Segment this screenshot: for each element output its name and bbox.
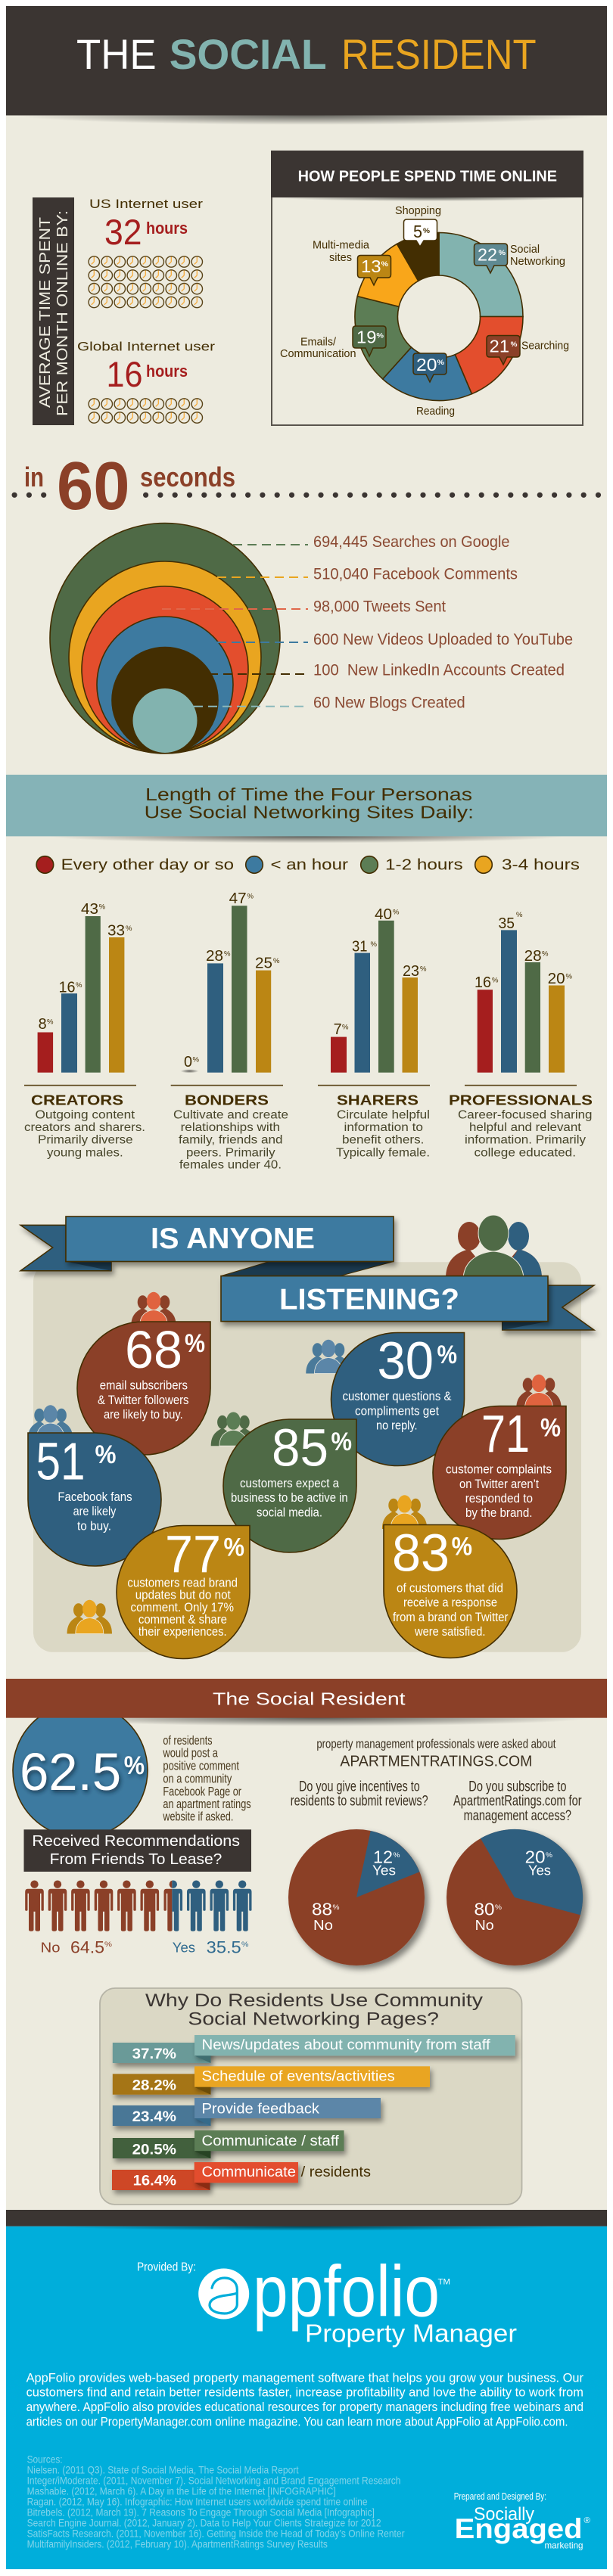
persona: creators <box>24 1085 145 1159</box>
sixty second stats list: 98,000 Tweets Sent <box>313 598 446 616</box>
ribbon bar: news 37.7% <box>113 2035 515 2063</box>
pie chart: subscribe: 80 <box>474 1900 495 1919</box>
ribbon: listening <box>221 1276 594 1330</box>
logo: appfolio <box>198 2251 517 2348</box>
credit: socially engaged marketing: ® <box>584 2516 590 2525</box>
text: sources: MultifamilyInsiders. (2012, February 10). ApartmentRatings Survey Results <box>27 2538 328 2550</box>
stat bubble: 30%: 30 <box>377 1332 434 1391</box>
stat bubble: 85%: customers expect a <box>240 1476 339 1490</box>
text: 62.5% description: of residents <box>163 1733 212 1748</box>
donut category labels: Communication <box>280 347 356 360</box>
bar chart: professionals: 20 <box>548 971 565 987</box>
donut category labels: Emails/ <box>300 336 337 348</box>
legend <box>36 856 580 873</box>
persona: sharers: benefit others. <box>342 1133 424 1146</box>
callout: social networking 22%: % <box>499 249 506 256</box>
US internet user stat: 32 <box>104 212 142 252</box>
credit: socially engaged marketing: Engaged <box>455 2513 583 2544</box>
panel: why residents use community pages: Why Do Residents Use Community <box>145 1990 483 2011</box>
callout: searching 21%: % <box>511 340 517 348</box>
bar chart: professionals <box>475 911 572 1073</box>
stat bubble: 51%: Facebook fans <box>58 1490 132 1504</box>
footer panel: cyan <box>6 2226 607 2569</box>
recommendation results <box>41 1938 248 1957</box>
text: 62.5% description: positive comment <box>163 1759 239 1773</box>
ribbon bar: events 28.2%: Schedule of events/activities <box>201 2069 395 2085</box>
text: apartment ratings intro: Do you subscribe to <box>468 1779 566 1794</box>
text: 62.5% description: would post a <box>163 1746 218 1760</box>
stat bubble: 77%: their experiences. <box>138 1625 227 1639</box>
cream page background <box>6 115 607 2211</box>
ribbon bar: communicate staff 20.5%: Communicate / staff <box>201 2133 340 2149</box>
icon: people left of 85% <box>211 1412 256 1446</box>
heading: in 60 seconds: seconds <box>140 461 235 493</box>
ribbon: listening: LISTENING? <box>279 1283 459 1316</box>
panel: why residents use community pages: Social Networking Pages? <box>188 2009 439 2030</box>
persona: sharers: Circulate helpful <box>337 1109 430 1121</box>
persona: bonders: Cultivate and create <box>173 1109 288 1121</box>
stat bubble: 51% <box>28 1431 161 1566</box>
stat bubble: 68%: % <box>185 1329 205 1358</box>
title banner: SOCIAL <box>170 30 327 78</box>
bar chart: bonders: % <box>224 950 230 958</box>
stat bubble: 77%: comment & share <box>138 1613 227 1627</box>
callout: shopping 5%: % <box>423 227 430 235</box>
ribbon bar: communicate residents 16.4%: Communicate <box>201 2164 296 2180</box>
text: 62.5% description: Facebook Page or <box>163 1784 241 1798</box>
bar chart: professionals: % <box>492 976 498 983</box>
provided by label: Provided By: <box>137 2261 196 2274</box>
bar chart: sharers: 31 <box>352 939 368 956</box>
ribbon bar: news 37.7%: News/updates about community from staff <box>201 2037 490 2053</box>
ribbon bar: communicate staff 20.5% <box>113 2130 344 2158</box>
text: apartment ratings intro: residents to submit reviews? <box>291 1793 428 1809</box>
stat bubble: 83% <box>384 1524 517 1658</box>
persona: professionals: helpful and relevant <box>469 1121 582 1134</box>
icon: people above 51% <box>28 1405 73 1439</box>
text: sources: SatisFacts Research. (2011, November 16). Getting Inside the Head of Today’s Online Renter <box>27 2528 405 2540</box>
bar chart: bonders: % <box>273 957 280 965</box>
pie chart: subscribe: % <box>495 1903 502 1911</box>
credit: socially engaged marketing: marketing <box>545 2540 583 2551</box>
heading: recommendations: From Friends To Lease? <box>50 1851 222 1868</box>
text: appfolio description: customers find and retain better residents faster, increase profitability and love the ability to work from <box>26 2385 583 2400</box>
ribbon bar: events 28.2%: 28.2% <box>132 2077 176 2093</box>
bar chart: bonders: 0 <box>184 1054 192 1070</box>
stat bubble: 68%: 68 <box>125 1320 182 1379</box>
stat circle: 62.5% <box>12 1717 148 1829</box>
section banner: personas: Use Social Networking Sites Daily: <box>145 803 474 822</box>
global internet user stat: Global Internet user <box>77 339 215 354</box>
stat bubble: 51%: 51 <box>36 1431 85 1490</box>
sixty second stats list: 60 New Blogs Created <box>313 694 465 712</box>
donut category labels: sites <box>329 251 352 264</box>
stat bubble: 85%: % <box>331 1428 352 1456</box>
icon row: ten people <box>25 1881 252 1931</box>
heading: in 60 seconds: in <box>24 461 44 493</box>
text: sources: Ragan. (2012, May 16). Infographic: How Internet users worldwide spend time online <box>27 2496 368 2508</box>
dark divider band <box>6 2210 607 2226</box>
bar chart: professionals: % <box>542 950 548 958</box>
US internet user stat: hours <box>146 219 188 238</box>
heading: recommendations: Received Recommendations <box>32 1833 240 1850</box>
stat bubble: 71%: on Twitter aren’t <box>459 1477 539 1491</box>
icon: 18 clocks <box>89 399 203 423</box>
stat bubble: 30%: no reply. <box>376 1418 418 1433</box>
global internet user stat: hours <box>146 362 188 381</box>
title banner <box>6 6 607 115</box>
recommendation results: No <box>41 1941 61 1956</box>
stat bubble: 85% <box>223 1418 356 1552</box>
icon: people above 71% <box>516 1375 562 1409</box>
donut category labels <box>280 204 569 418</box>
bar chart: sharers: 40 <box>375 906 392 923</box>
persona: bonders: peers. Primarily <box>186 1146 275 1159</box>
stat bubble: 83%: were satisfied. <box>414 1624 486 1639</box>
persona: bonders <box>171 1085 288 1172</box>
heading: in 60 seconds <box>24 449 235 524</box>
pie chart: subscribe: No <box>475 1918 494 1933</box>
vertical heading: average time spent: PER MONTH ONLINE BY: <box>54 210 71 416</box>
ribbon: is anyone <box>20 1217 394 1276</box>
icon: people above 83% <box>382 1495 427 1529</box>
stat bubble: 30% <box>331 1332 465 1466</box>
vertical heading: average time spent <box>33 197 74 425</box>
icon: 36 clocks <box>89 256 203 308</box>
stat bubble: 85%: business to be active in <box>231 1490 348 1505</box>
icon: people left of 30% <box>306 1340 351 1374</box>
stat bubble: 77%: updates but do not <box>135 1589 231 1602</box>
sixty second stats list: 100 New LinkedIn Accounts Created <box>313 662 565 679</box>
ribbon bar: feedback 23.4% <box>113 2098 381 2126</box>
callout: shopping 5%: 5 <box>413 222 422 241</box>
ribbon bar: communicate residents 16.4% <box>112 2162 371 2190</box>
bar chart: sharers: % <box>371 940 377 948</box>
band shadow <box>49 829 564 843</box>
bar chart: bonders: % <box>192 1056 199 1064</box>
recommendation results: 64.5 <box>70 1938 104 1957</box>
callout: emails 19% <box>353 326 386 356</box>
credit: socially engaged marketing <box>454 2491 590 2551</box>
logo: appfolio: TM <box>437 2277 450 2286</box>
text: apartment ratings intro: APARTMENTRATINGS.COM <box>340 1753 532 1770</box>
sixty second stats list <box>313 533 573 712</box>
bar chart: sharers <box>331 906 427 1073</box>
stat bubble: 77%: % <box>224 1533 244 1562</box>
section banner: personas <box>6 775 607 836</box>
ribbon bar: feedback 23.4%: Provide feedback <box>201 2101 320 2117</box>
stat bubble: 71%: % <box>540 1414 561 1443</box>
stat bubble: 83%: % <box>452 1533 472 1561</box>
ribbon bar: communicate residents 16.4%: 16.4% <box>133 2173 176 2189</box>
legend: 1-2 hours <box>385 856 463 873</box>
persona: bonders: females under 40. <box>179 1159 282 1172</box>
stat bubble: 51%: to buy. <box>77 1518 111 1533</box>
persona: sharers: SHARERS <box>337 1092 419 1108</box>
pie chart: incentives: Yes <box>372 1863 396 1878</box>
text: sources: Mashable. (2012, March 6). A Day in the Life of the Internet [INFOGRAPHIC] <box>27 2485 336 2497</box>
text: sources <box>27 2453 405 2550</box>
callout: social networking 22% <box>474 244 507 273</box>
dashed leader lines <box>162 545 308 707</box>
bar chart: sharers: 23 <box>403 963 419 980</box>
callout: multi-media 13% <box>357 256 391 285</box>
stat bubble: 68%: email subscribers <box>100 1378 188 1393</box>
pie chart: incentives: % <box>394 1851 400 1859</box>
bar chart: creators: % <box>99 903 105 911</box>
text: apartment ratings intro: management access? <box>464 1808 571 1824</box>
vertical heading: average time spent: AVERAGE TIME SPENT <box>37 217 54 408</box>
stat bubble: 77% <box>117 1524 250 1658</box>
text: sources: Search Engine Journal. (2012, January 2). Data to Help Your Clients Strategize for 2012 <box>27 2517 381 2529</box>
title banner: RESIDENT <box>341 30 537 78</box>
persona: bonders: family, friends and <box>179 1133 283 1146</box>
pie chart: incentives: 12 <box>373 1847 393 1867</box>
credit: socially engaged marketing: Prepared and Designed By: <box>454 2491 546 2502</box>
bar chart: professionals: % <box>516 911 522 918</box>
callout: emails 19%: 19 <box>356 328 376 347</box>
bar chart: professionals: % <box>566 972 572 980</box>
stat bubble: 68%: are likely to buy. <box>104 1407 183 1422</box>
pie chart: subscribe: 20 <box>525 1847 545 1867</box>
stat bubble: 71%: customer complaints <box>446 1462 552 1477</box>
donut category labels: Reading <box>416 405 455 418</box>
ribbon: is anyone: IS ANYONE <box>151 1223 315 1255</box>
callout: searching 21%: 21 <box>490 336 509 356</box>
icon: people left of 77% <box>67 1600 112 1634</box>
ribbon bar: news 37.7%: 37.7% <box>132 2046 176 2062</box>
pie chart: subscribe: Yes <box>528 1863 551 1878</box>
text: sources: Nielsen. (2011 Q3). State of Social Media, The Social Media Report <box>27 2464 299 2476</box>
band shadow <box>45 1710 590 1726</box>
stat circle: 62.5%: % <box>124 1751 145 1780</box>
nested circles chart <box>50 524 280 754</box>
persona: professionals <box>449 1085 593 1159</box>
section banner: the social resident <box>6 1679 607 1718</box>
ribbon bar: feedback 23.4%: 23.4% <box>132 2109 176 2125</box>
legend: Every other day or so <box>61 856 234 873</box>
text: appfolio description: AppFolio provides web-based property management software that helps you grow your business. Our <box>26 2370 583 2385</box>
text: apartment ratings intro: Do you give incentives to <box>299 1779 420 1794</box>
bar chart: sharers: 7 <box>334 1021 342 1038</box>
persona: bonders: relationships with <box>181 1121 280 1134</box>
pie chart: subscribe <box>447 1829 583 1965</box>
stat bubble: 77%: 77 <box>165 1524 221 1583</box>
US internet user stat: US Internet user <box>89 197 203 211</box>
bar chart: bonders: % <box>247 892 254 900</box>
panel: how people spend time online <box>271 151 583 425</box>
text: sources: Integer/iModerate. (2011, November 7). Social Networking and Brand Engagement Research <box>27 2475 400 2487</box>
bar chart: creators: 16 <box>59 979 76 996</box>
bar chart: creators: % <box>76 981 82 989</box>
callout: multi-media 13%: 13 <box>361 256 381 276</box>
recommendation results: 35.5 <box>207 1938 241 1957</box>
bar chart: creators: 8 <box>39 1016 47 1033</box>
persona: sharers <box>318 1085 430 1159</box>
ribbon bar: events 28.2% <box>113 2066 430 2095</box>
stat bubble: 83%: from a brand on Twitter <box>393 1610 509 1624</box>
stat bubble: 83%: 83 <box>392 1524 450 1583</box>
stat bubble: 30%: % <box>437 1341 457 1369</box>
bar chart: creators: 43 <box>81 901 98 918</box>
persona: creators: CREATORS <box>31 1092 123 1108</box>
stat bubble: 30%: customer questions & <box>342 1389 452 1403</box>
logo: appfolio: ppfolio <box>253 2251 440 2332</box>
pie chart: incentives: No <box>313 1918 333 1933</box>
heading: recommendations <box>24 1829 251 1872</box>
bar chart: bonders <box>180 890 280 1073</box>
recommendation results: % <box>104 1941 112 1948</box>
donut chart <box>355 233 523 401</box>
donut category labels: Networking <box>510 255 565 268</box>
icon: large listening group <box>446 1215 542 1280</box>
bar chart: creators <box>38 901 132 1073</box>
persona: sharers: information to <box>344 1121 423 1134</box>
sixty second stats list: 600 New Videos Uploaded to YouTube <box>313 631 573 648</box>
pie chart: incentives: 88 <box>312 1900 332 1919</box>
callout: reading 20% <box>413 353 447 382</box>
donut category labels: Shopping <box>395 204 441 217</box>
persona: professionals: college educated. <box>474 1146 576 1159</box>
bar chart: sharers: % <box>393 908 400 915</box>
header band shadow <box>15 105 598 125</box>
bar chart: creators: % <box>126 924 132 932</box>
stat bubble: 77%: comment. Only 17% <box>130 1601 234 1614</box>
sixty second stats list: 510,040 Facebook Comments <box>313 566 518 583</box>
persona: creators: young males. <box>47 1146 123 1159</box>
title banner: THE <box>76 30 157 78</box>
stat bubble: 51%: are likely <box>73 1504 117 1518</box>
stat bubble: 85%: 85 <box>272 1418 328 1477</box>
callout: reading 20%: 20 <box>416 355 437 374</box>
recommendation results: % <box>241 1941 248 1948</box>
pie chart: incentives <box>288 1829 425 1965</box>
stat bubble: 71%: by the brand. <box>465 1506 533 1520</box>
stat bubble: 51%: % <box>95 1440 117 1469</box>
logo: appfolio: a <box>203 2267 232 2326</box>
sixty second stats list: 694,445 Searches on Google <box>313 533 510 551</box>
persona: sharers: Typically female. <box>336 1146 430 1159</box>
footer band shadow <box>57 2222 556 2231</box>
text: 62.5% description: an apartment ratings <box>163 1797 251 1811</box>
panel: how people spend time online: HOW PEOPLE SPEND TIME ONLINE <box>298 168 557 185</box>
pie chart: subscribe: % <box>546 1851 552 1859</box>
dotted rule <box>12 493 601 498</box>
persona: professionals: PROFESSIONALS <box>449 1092 593 1108</box>
persona: creators: Outgoing content <box>35 1109 135 1121</box>
donut category labels: Social <box>510 243 540 256</box>
global internet user stat: 16 <box>106 354 142 394</box>
global internet user stat <box>77 339 215 394</box>
callout: searching 21% <box>487 336 520 365</box>
text: apartment ratings intro <box>291 1737 582 1824</box>
bar chart: creators: 33 <box>107 923 125 940</box>
bar chart: professionals: 28 <box>524 948 542 965</box>
bar chart: professionals: 16 <box>475 974 491 991</box>
bar chart: sharers: % <box>342 1023 348 1030</box>
credit: socially engaged marketing: Socially <box>474 2504 534 2525</box>
callout: emails 19%: % <box>376 331 384 339</box>
callout: shopping 5% <box>404 219 437 247</box>
icon: people above 68% <box>131 1292 176 1325</box>
text: sources: Bitrebels. (2012, March 19). 7 Reasons To Engage Through Social Media [Infographic] <box>27 2506 375 2519</box>
legend: 3-4 hours <box>502 856 580 873</box>
callout: social networking 22%: 22 <box>478 245 497 265</box>
callout: multi-media 13%: % <box>381 260 388 268</box>
ribbon bar: communicate residents 16.4%: / residents <box>301 2164 371 2180</box>
bar chart: bonders: 25 <box>255 955 272 971</box>
stat bubble: 77%: customers read brand <box>127 1577 238 1590</box>
stat bubble: 68% <box>77 1320 210 1455</box>
stat bubble: 30%: compliments get <box>355 1403 439 1418</box>
stat bubble: 71%: 71 <box>481 1404 530 1463</box>
bar chart: sharers: % <box>420 965 427 973</box>
stat bubble: 85%: social media. <box>257 1505 322 1519</box>
persona: professionals: Career-focused sharing <box>458 1109 592 1121</box>
persona: bonders: BONDERS <box>185 1092 269 1108</box>
donut category labels: Multi-media <box>313 239 370 251</box>
stat bubble: 71% <box>433 1404 566 1539</box>
persona: creators: creators and sharers. <box>24 1121 145 1134</box>
stat bubble: 68%: & Twitter followers <box>98 1393 189 1407</box>
panel: why residents use community pages <box>100 1988 522 2205</box>
stat circle: 62.5%: 62.5 <box>20 1742 121 1801</box>
text: appfolio description <box>26 2370 583 2428</box>
donut category labels: Searching <box>521 339 569 353</box>
persona: creators: Primarily diverse <box>38 1133 133 1146</box>
pie chart: incentives: % <box>333 1903 339 1911</box>
logo: appfolio: Property Manager <box>305 2320 517 2348</box>
text: 62.5% description: on a community <box>163 1772 232 1786</box>
recommendation results: Yes <box>173 1941 195 1956</box>
persona: professionals: information. Primarily <box>465 1133 586 1146</box>
bar chart: bonders: 28 <box>206 948 223 965</box>
bar chart: creators: % <box>47 1018 53 1026</box>
bar chart: professionals: 35 <box>498 915 515 932</box>
text: sources: Sources: <box>27 2453 63 2466</box>
panel: is anyone listening background <box>33 1262 581 1652</box>
section banner: the social resident: The Social Resident <box>213 1689 406 1708</box>
callout: reading 20%: % <box>437 359 444 366</box>
heading: in 60 seconds: 60 <box>57 449 130 524</box>
stat bubble: 83%: of customers that did <box>397 1581 503 1595</box>
text: 62.5% description: website if asked. <box>163 1810 233 1824</box>
section banner: personas: Length of Time the Four Personas <box>145 785 472 804</box>
stat bubble: 83%: receive a response <box>403 1596 497 1610</box>
ribbon bar: communicate staff 20.5%: 20.5% <box>132 2142 176 2158</box>
bar chart: bonders: 47 <box>229 890 247 907</box>
US internet user stat <box>89 197 203 252</box>
text: 62.5% description <box>163 1733 251 1824</box>
stat bubble: 71%: responded to <box>465 1491 533 1506</box>
legend: < an hour <box>271 856 348 873</box>
